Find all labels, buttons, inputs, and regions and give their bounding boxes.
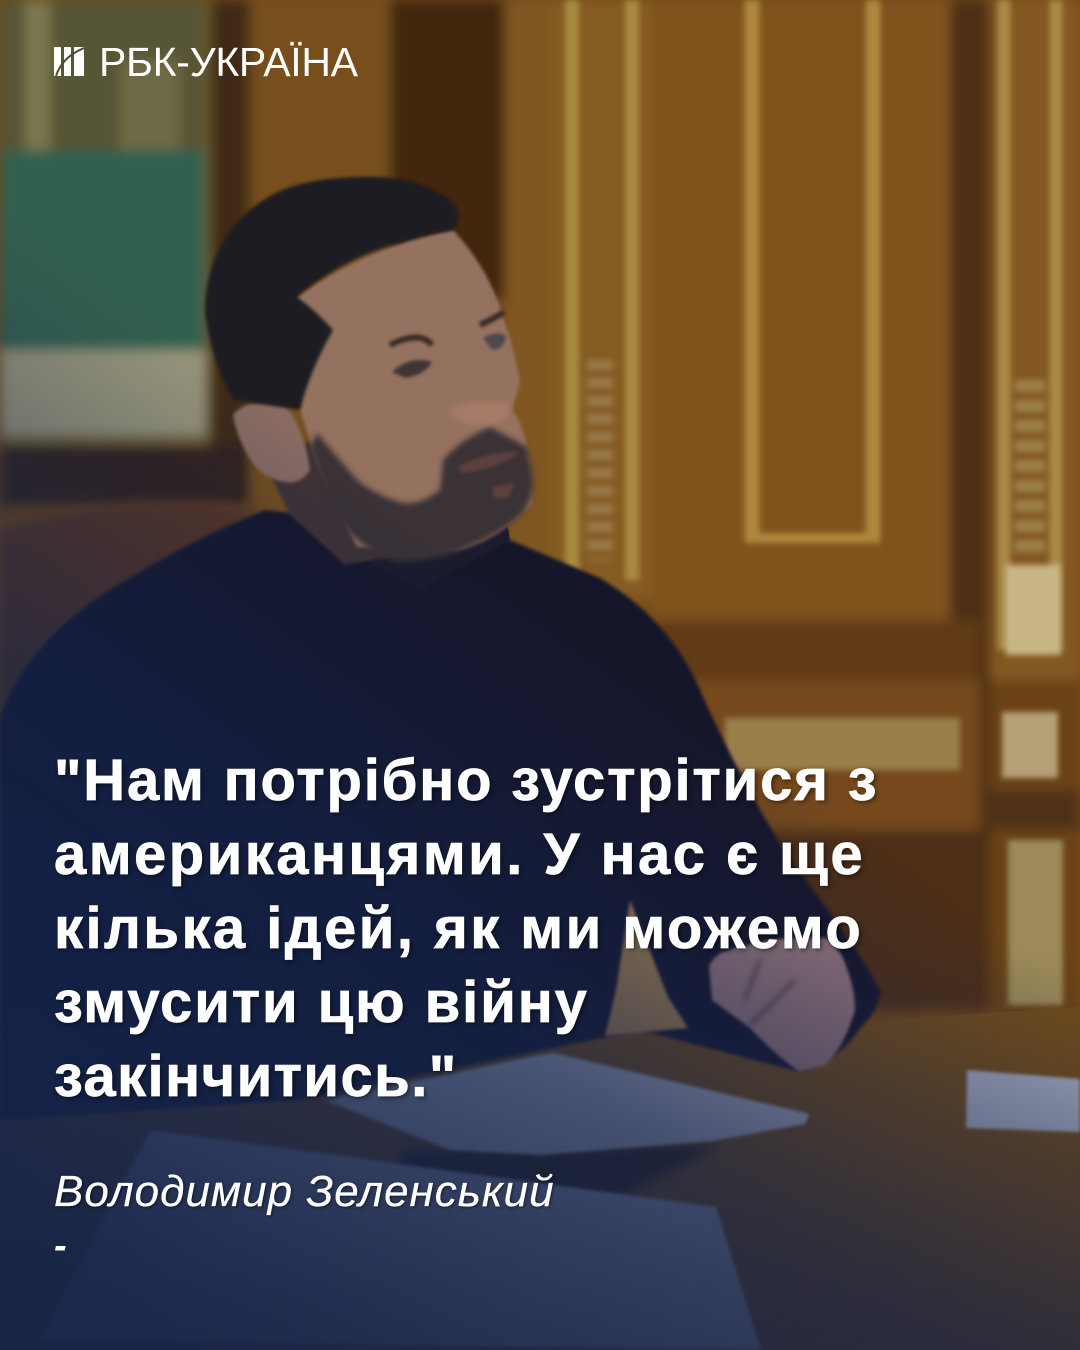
table [0, 1007, 1080, 1350]
eyes and brows [390, 312, 506, 378]
ear [233, 403, 310, 482]
quote text: змусити цю війну [54, 970, 589, 1035]
sweater [0, 510, 881, 1120]
neck [300, 480, 510, 590]
neck skin [268, 440, 400, 565]
quote text: американцями. У нас є ще [54, 822, 865, 887]
logo wordmark: РБК-УКРАЇНА [99, 39, 358, 85]
finger creases [745, 960, 795, 1025]
lips and chin shadow [458, 452, 520, 498]
beard [310, 427, 533, 562]
leather chair [0, 503, 260, 710]
nose [450, 401, 510, 425]
hand [709, 938, 855, 1072]
glass object on table [605, 900, 688, 1036]
paper right [966, 1070, 1080, 1132]
quote text [54, 748, 879, 1109]
icon: logo mark [54, 47, 84, 76]
gilded mouldings [572, 0, 1063, 1005]
attribution: speaker name: Володимир Зеленський [54, 1167, 555, 1216]
quote text: закінчитись." [54, 1044, 458, 1109]
papers [325, 1053, 809, 1155]
logo: РБК-Україна [54, 39, 358, 85]
paper foreground [40, 1130, 761, 1350]
quote text: "Нам потрібно зустрітися з [54, 748, 878, 813]
hair [205, 177, 458, 410]
attribution: dash: - [54, 1225, 67, 1267]
table shadow under paper [400, 1145, 720, 1240]
face [297, 230, 532, 550]
quote text: кілька ідей, як ми можемо [54, 896, 863, 961]
wood panelling and painting [0, 0, 1080, 1020]
